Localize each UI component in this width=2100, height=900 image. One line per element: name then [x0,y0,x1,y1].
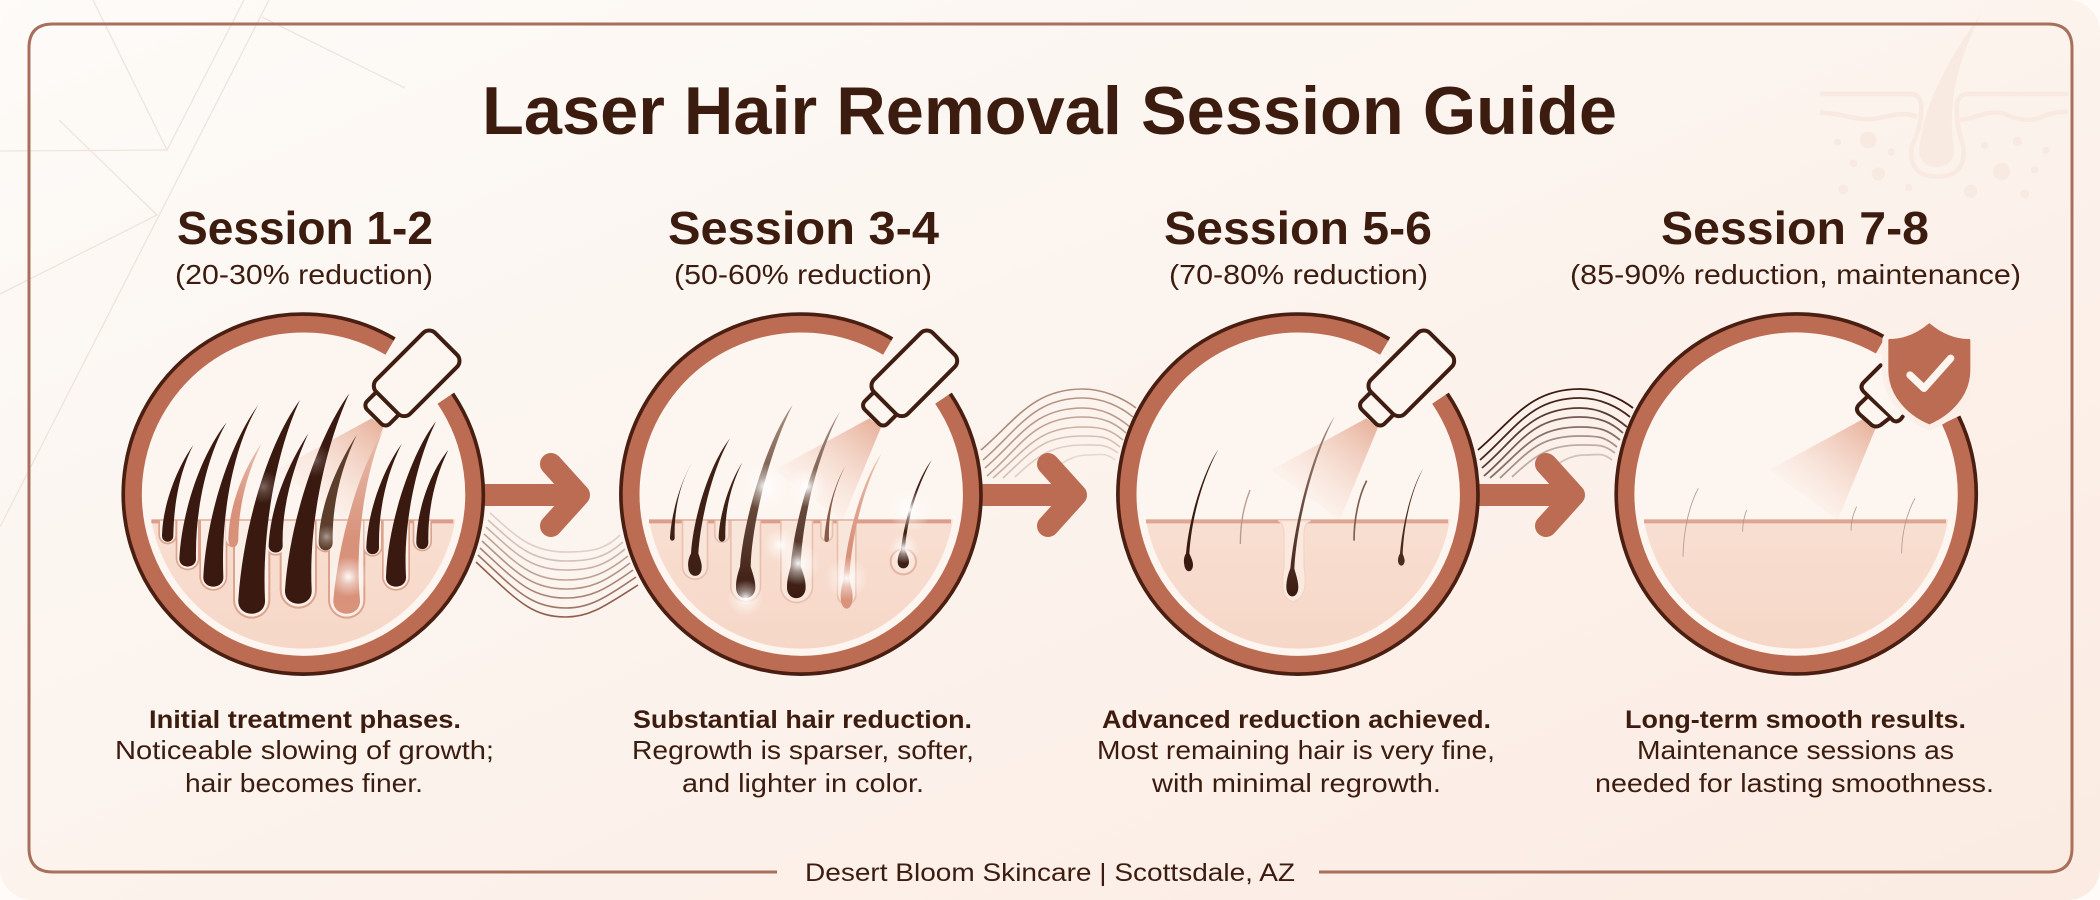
illustration: sparser hair [621,314,981,674]
description: session 5-6: Advanced reduction achieved. [1102,706,1491,734]
panel: session 5-6 [1097,202,1495,798]
illustration: smooth skin [1616,314,1976,674]
icon: laser handpiece [854,327,961,433]
description: session 1-2: Initial treatment phases. [149,706,461,734]
reduction: session 7-8: (85-90% reduction, maintenance) [1570,259,2021,290]
description: session 1-2: Noticeable slowing of growth; [115,735,494,765]
heading: session 3-4: Session 3-4 [668,202,939,254]
description: session 3-4: Substantial hair reduction. [633,706,972,734]
arrow 2 [967,464,1076,526]
description: session 3-4: Regrowth is sparser, softer, [632,735,974,765]
reduction: session 1-2: (20-30% reduction) [175,259,433,290]
description: session 1-2 [115,706,494,798]
connector waves 2 [981,389,1136,478]
heading: session 7-8: Session 7-8 [1661,202,1929,254]
connector waves 1 [476,513,638,617]
description: session 3-4 [632,706,974,798]
description: session 7-8 [1595,706,1994,798]
description: session 7-8: Maintenance sessions as [1637,735,1954,765]
icon: shield with check mark [1889,324,1969,423]
panel: session 7-8 [1570,202,2021,798]
icon: laser handpiece [1351,327,1458,433]
decorative geometric lines top-left [0,0,405,527]
panel: session 1-2 [115,202,494,798]
title: Laser Hair Removal Session Guide [482,73,1617,149]
heading: session 5-6: Session 5-6 [1164,202,1432,254]
description: session 5-6 [1097,706,1495,798]
watermark: hair follicle top-right [1820,13,2068,199]
description: session 3-4: and lighter in color. [682,768,924,798]
arrow 1 [470,464,579,526]
panel: session 3-4 [621,202,981,798]
icon: laser handpiece partial [1857,365,1903,426]
description: session 5-6: with minimal regrowth. [1151,768,1441,798]
reduction: session 3-4: (50-60% reduction) [674,259,932,290]
illustration: dense hair [123,314,483,674]
footer: Desert Bloom Skincare | Scottsdale, AZ [805,859,1295,887]
description: session 7-8: Long-term smooth results. [1625,706,1966,734]
reduction: session 5-6: (70-80% reduction) [1169,259,1428,290]
description: session 5-6: Most remaining hair is very fine, [1097,735,1495,765]
description: session 7-8: needed for lasting smoothness. [1595,768,1994,798]
connector waves 3 [1478,389,1633,478]
description: session 1-2: hair becomes finer. [185,768,423,798]
illustration: fine hair [1118,314,1478,674]
heading: session 1-2: Session 1-2 [177,202,433,254]
arrow 3 [1465,464,1574,526]
icon: laser handpiece [357,327,463,433]
